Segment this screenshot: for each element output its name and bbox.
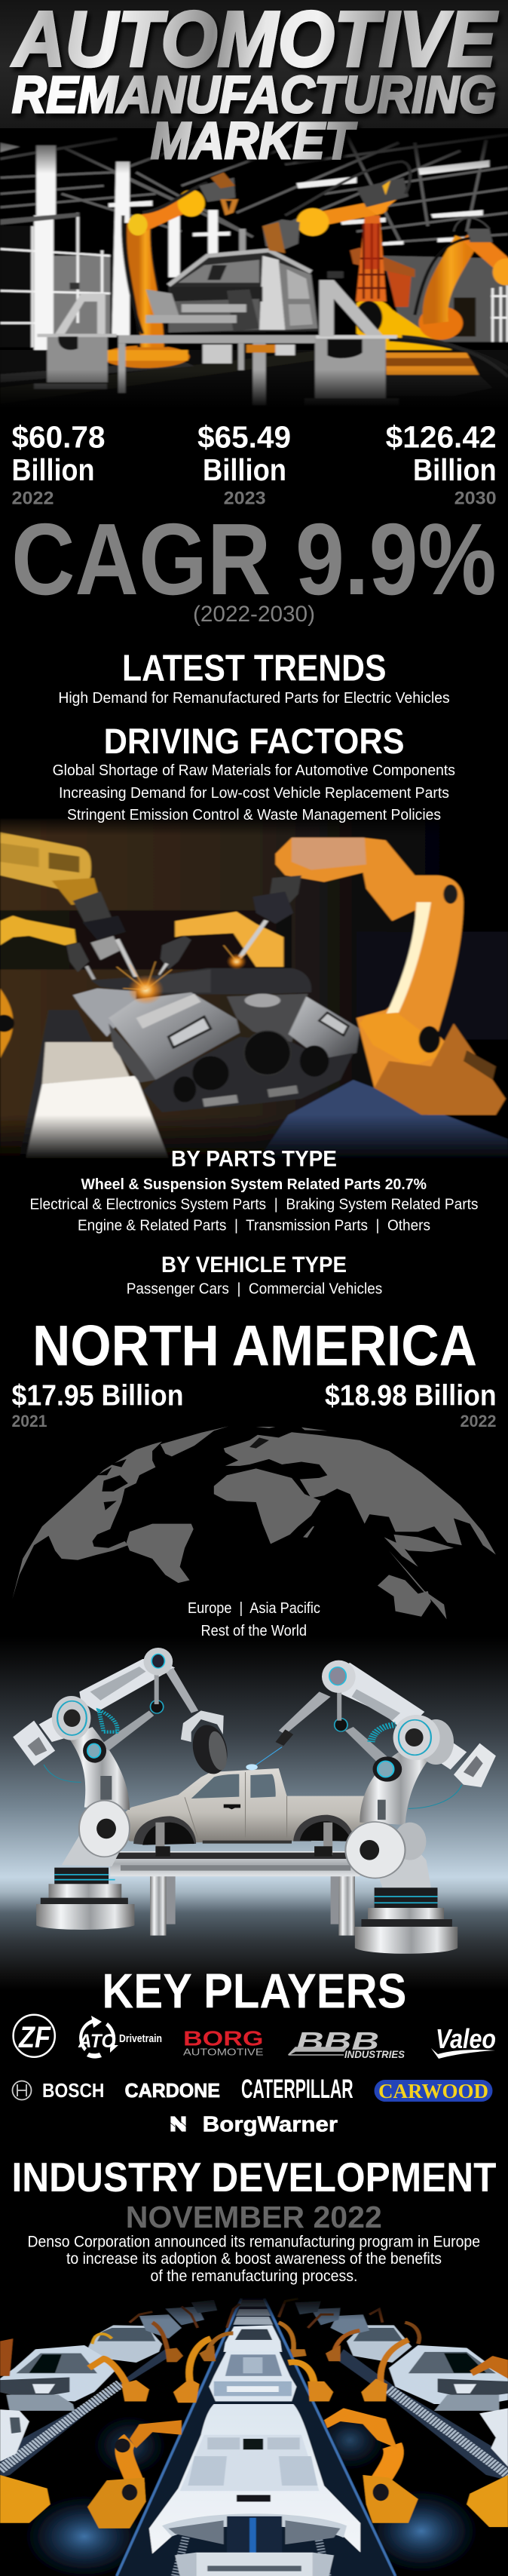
latest trends heading: LATEST TRENDS [122, 649, 386, 689]
north america 2021 value: $17.95 Billion [12, 1380, 184, 1412]
title: MARKET [151, 112, 357, 170]
right robot [389, 218, 508, 377]
far-left arm [0, 989, 13, 1058]
orange glow base left [246, 345, 276, 353]
engine scene top fade [0, 816, 508, 836]
conveyor left [0, 2349, 169, 2478]
north america 2022 value [325, 1380, 497, 1431]
development text: to increase its adoption & boost awareness of the benefits [66, 2250, 442, 2268]
by parts type heading: BY PARTS TYPE [171, 1146, 337, 1171]
lower fade [0, 1115, 508, 1161]
vehicle type list: Passenger Cars | Commercial Vehicles [127, 1280, 382, 1297]
logo: ZF: ZF [18, 2021, 51, 2054]
market size 2023 [197, 420, 291, 509]
logo: Borg Automotive: AUTOMOTIVE [183, 2047, 264, 2057]
right fixture stand [304, 271, 399, 405]
development text: of the remanufacturing process. [151, 2268, 357, 2285]
market size 2022 [12, 420, 106, 509]
engine blocks [73, 989, 136, 1037]
robot section background [0, 1636, 508, 1991]
central table [118, 335, 320, 405]
market size 2030 [386, 420, 497, 509]
south america [127, 1524, 194, 1583]
ceiling lights [0, 143, 489, 246]
left car back row [84, 2300, 217, 2363]
left robot [102, 172, 238, 368]
centre back yellow arm [175, 912, 283, 967]
pickup truck [118, 1768, 366, 1857]
logo: ZF [14, 2015, 55, 2057]
market size 2023: $65.49 [197, 420, 291, 455]
parts type list [30, 1176, 478, 1234]
market size 2030: Billion [413, 452, 497, 487]
distant robots [130, 2298, 382, 2328]
side walls [39, 256, 110, 336]
title [11, 0, 497, 170]
orange robots, outer edge [0, 2338, 508, 2527]
south-east asia islands [384, 1535, 454, 1619]
north america 2022 value: $18.98 Billion [325, 1380, 497, 1412]
logo: Valeo: Valeo [436, 2023, 496, 2054]
market size 2022: $60.78 [12, 420, 106, 455]
parts type list: Electrical & Electronics System Parts | Braking System Related Parts [30, 1197, 478, 1213]
logo: BorgWarner: BorgWarner [203, 2113, 338, 2137]
front centre car [149, 2404, 360, 2576]
other regions list: Europe | Asia Pacific [188, 1600, 320, 1617]
australia [378, 1575, 431, 1617]
floor blue light [23, 2494, 145, 2576]
distant centre cars [224, 2300, 282, 2352]
conveyor right [337, 2349, 508, 2480]
right robot [246, 1661, 496, 1954]
market size 2023: 2023 [224, 489, 266, 509]
second centre car [209, 2351, 296, 2401]
top-left yellow arm [0, 833, 91, 890]
by vehicle type heading: BY VEHICLE TYPE [161, 1253, 347, 1277]
hero scene: factory robots welding a car body [0, 129, 508, 409]
left robot [13, 1648, 231, 1930]
far robot [386, 264, 412, 307]
logo: Cardone: CARDONE [125, 2079, 220, 2102]
logo: BBB Industries: INDUSTRIES [344, 2048, 405, 2060]
north america 2021 value: 2021 [12, 1412, 47, 1431]
logo: Borg Automotive [183, 2027, 264, 2057]
left fixture stand [34, 283, 117, 389]
latest trends text: High Demand for Remanufactured Parts for Electric Vehicles [58, 690, 450, 707]
logo: ATC Drivetrain [78, 2016, 162, 2059]
north america 2021 value [12, 1380, 184, 1431]
logo: ATC Drivetrain: ATC [78, 2031, 115, 2052]
logo: Bosch [12, 2079, 104, 2102]
driving factors list: Stringent Emission Control & Waste Management Policies [67, 807, 441, 823]
eurasia [224, 1432, 496, 1555]
centre robot [262, 161, 493, 396]
CAGR period: (2022-2030) [193, 602, 315, 627]
right car back row [295, 2301, 412, 2363]
logo: BBB Industries [289, 2027, 405, 2060]
development text: Denso Corporation announced its remanufacturing program in Europe [27, 2234, 480, 2250]
welding sparks [128, 975, 164, 1004]
robots assembling a pickup truck [13, 1648, 496, 1954]
top fade [0, 2295, 508, 2320]
logo: Caterpillar: CATERPILLAR [241, 2075, 353, 2104]
north america [12, 1442, 162, 1599]
car body frame [146, 250, 320, 333]
logo: BBB Industries: BBB [296, 2027, 379, 2055]
assembly line scene [0, 2295, 508, 2576]
africa [214, 1468, 321, 1544]
orange robots, middle rows [89, 2323, 419, 2392]
market size 2022: Billion [12, 452, 95, 487]
floor [0, 350, 508, 409]
conveyor floor [20, 1010, 145, 1158]
orange robots, front pair [87, 2408, 418, 2528]
centre conveyor [117, 2298, 396, 2576]
right front car [389, 2345, 508, 2467]
key players heading: KEY PLAYERS [102, 1964, 406, 2019]
driving factors list: Global Shortage of Raw Materials for Automotive Components [53, 762, 455, 779]
other regions list [188, 1600, 320, 1639]
logo: Carwood: CARWOOD [378, 2080, 488, 2102]
left front car [0, 2345, 115, 2461]
engine scene: robot arms welding an engine [0, 819, 508, 1169]
development text [27, 2234, 480, 2285]
logo: Bosch: BOSCH [42, 2079, 104, 2102]
engine cover [90, 968, 311, 994]
driving factors list [53, 762, 455, 823]
tire and gripper [189, 1723, 231, 1776]
columns [34, 146, 246, 350]
market size 2023: Billion [203, 452, 286, 487]
logo: ATC Drivetrain: Drivetrain [119, 2032, 162, 2045]
greenland [161, 1426, 228, 1456]
north america heading: NORTH AMERICA [32, 1314, 477, 1378]
development date: NOVEMBER 2022 [126, 2200, 382, 2234]
world map [12, 1426, 496, 1619]
other regions list: Rest of the World [200, 1623, 307, 1639]
scene top fade [0, 128, 508, 173]
market size 2022: 2022 [12, 489, 54, 509]
table [110, 1851, 360, 1936]
market size 2030: $126.42 [386, 420, 497, 455]
left lower yellow arm [0, 915, 76, 946]
parts type list: Wheel & Suspension System Related Parts 20.7% [81, 1176, 427, 1193]
header band [0, 0, 508, 130]
north america 2022 value: 2022 [460, 1412, 496, 1431]
market size 2030: 2030 [454, 489, 497, 509]
logo: Borg Automotive: BORG [183, 2027, 264, 2050]
parts type list: Engine & Related Parts | Transmission Parts | Others [78, 1217, 430, 1234]
big right orange arm [276, 838, 499, 1115]
driving factors list: Increasing Demand for Low-cost Vehicle Replacement Parts [59, 785, 449, 802]
scene bottom fade [0, 370, 508, 409]
driving factors heading: DRIVING FACTORS [104, 721, 405, 761]
